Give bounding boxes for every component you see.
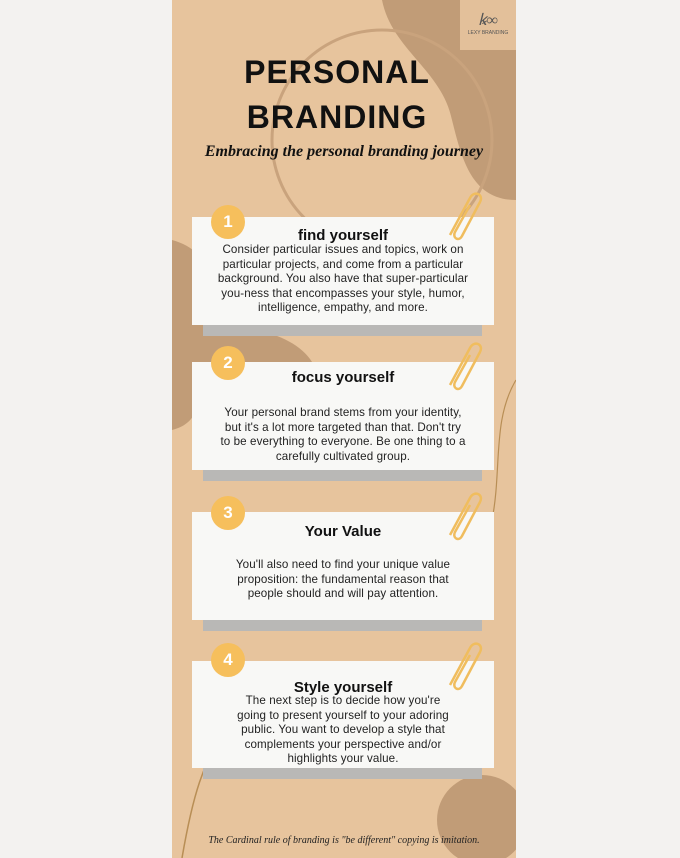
text: focus yourself xyxy=(292,369,394,386)
title xyxy=(244,54,430,135)
text: find yourself xyxy=(298,227,388,244)
paperclips xyxy=(449,192,482,690)
text: The next step is to decide how you're xyxy=(246,694,440,707)
card 4 xyxy=(192,643,494,779)
subtitle: Embracing the personal branding journey xyxy=(205,143,483,160)
text: 2 xyxy=(223,353,233,372)
text: Your personal brand stems from your identity, xyxy=(224,406,462,419)
logo box: LEXY BRANDING xyxy=(468,30,508,36)
text: Your Value xyxy=(305,523,381,540)
text: going to present yourself to your adoring xyxy=(237,708,449,722)
text: You'll also need to find your unique value xyxy=(236,558,450,571)
card 3 xyxy=(192,496,494,631)
text: background. You also have that super-particular xyxy=(218,272,468,285)
card 1 xyxy=(192,205,494,336)
text: 3 xyxy=(223,503,233,522)
text: proposition: the fundamental reason that xyxy=(237,572,449,586)
text: 4 xyxy=(223,650,233,669)
title: BRANDING xyxy=(247,99,427,135)
footer quote: The Cardinal rule of branding is "be different" copying is imitation. xyxy=(208,835,480,846)
text: carefully cultivated group. xyxy=(276,450,410,462)
logo box: ꝃ∞ xyxy=(478,12,498,29)
text: particular projects, and come from a particular xyxy=(223,258,463,270)
logo box xyxy=(460,0,516,50)
text: to be everything to everyone. Be one thing to a xyxy=(220,435,466,448)
background panel xyxy=(172,0,516,858)
card 2 xyxy=(192,346,494,481)
text: Style yourself xyxy=(294,679,392,696)
text: 1 xyxy=(223,212,233,231)
text: Consider particular issues and topics, work on xyxy=(222,243,464,256)
text: you-ness that encompasses your style, humor, xyxy=(221,286,465,300)
text: complements your perspective and/or xyxy=(245,738,441,750)
text: intelligence, empathy, and more. xyxy=(258,301,428,314)
title: PERSONAL xyxy=(244,54,430,90)
text: people should and will pay attention. xyxy=(248,587,438,600)
text: but it's a lot more targeted than that. Don't try xyxy=(225,420,461,434)
text: public. You want to develop a style that xyxy=(241,723,445,736)
text: highlights your value. xyxy=(287,752,399,765)
